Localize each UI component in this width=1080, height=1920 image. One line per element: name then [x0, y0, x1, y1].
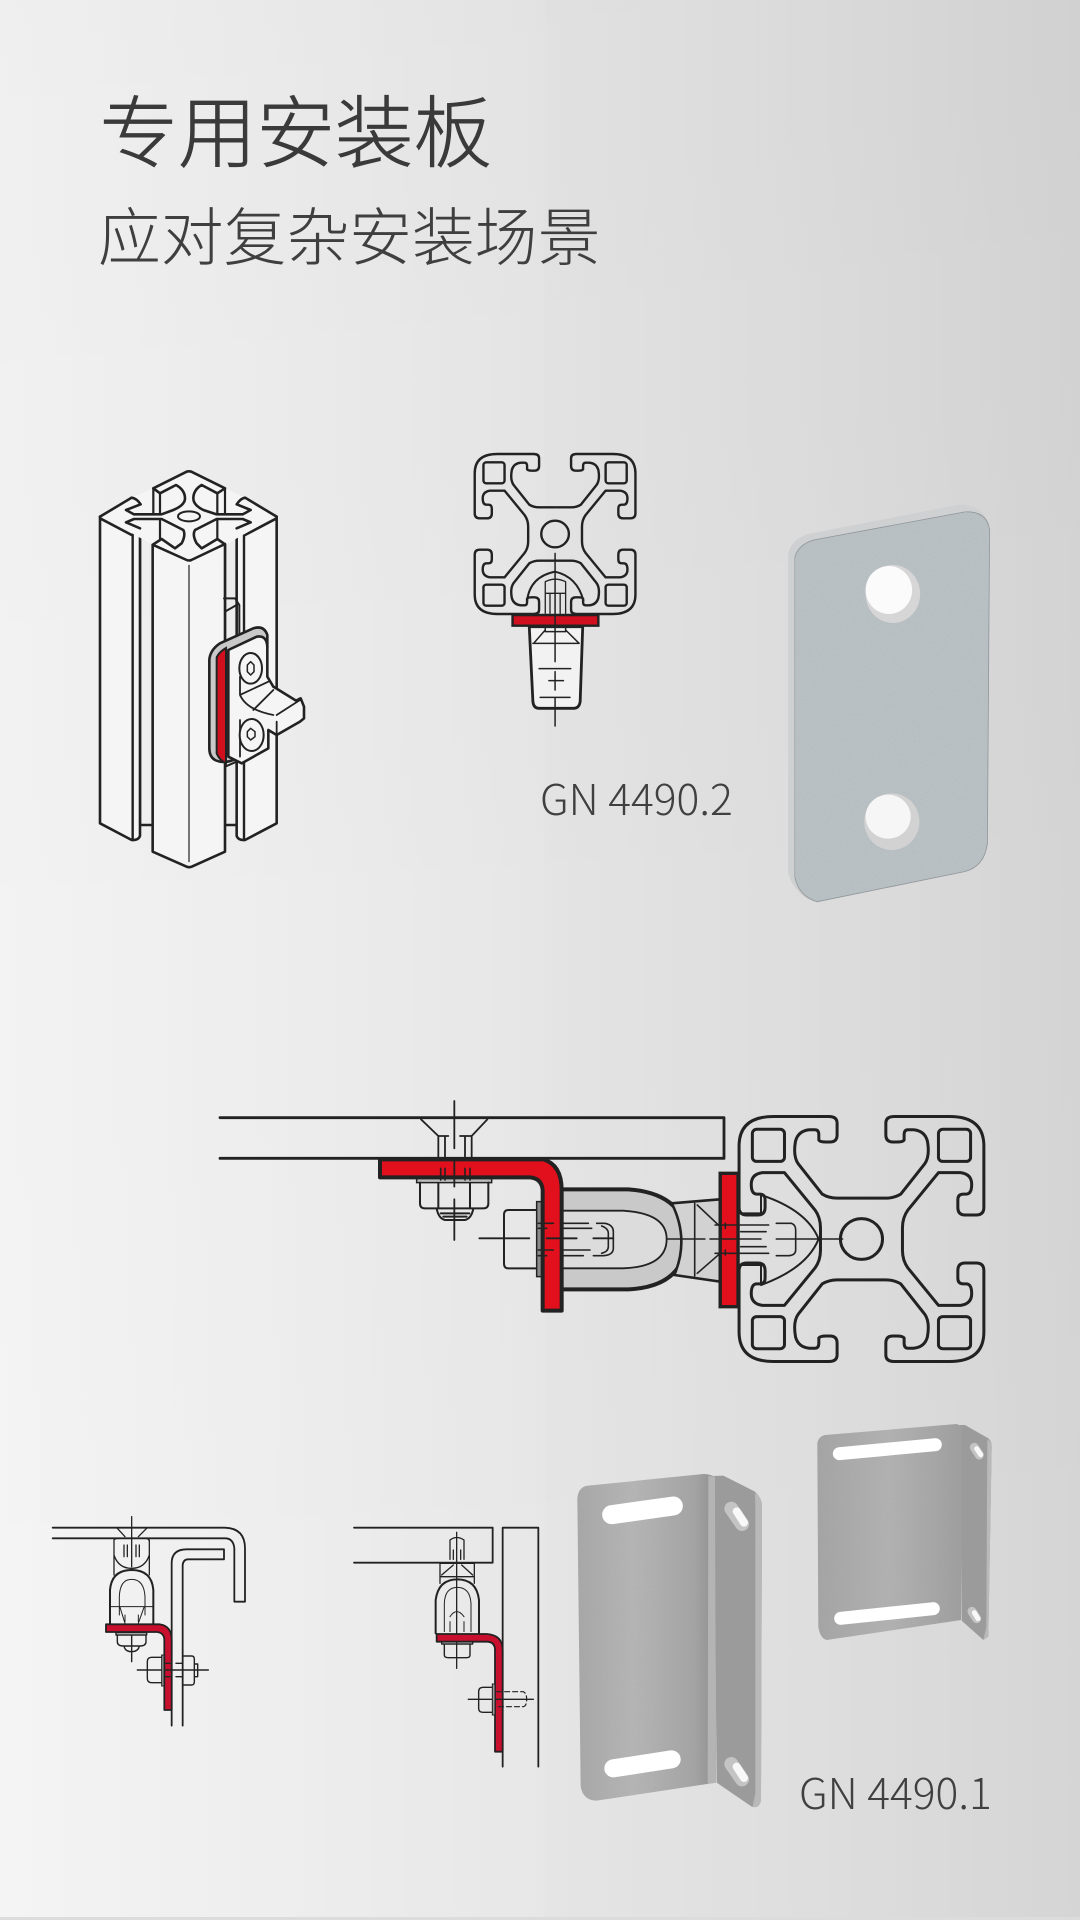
- hidden bolt lines: [441, 1168, 613, 1256]
- subtitle: 应对复杂安装场景: [98, 188, 600, 279]
- wall panel: [503, 1528, 538, 1767]
- red angle bracket: [380, 1159, 562, 1311]
- swivel foot: [529, 627, 583, 708]
- clamp body: [228, 636, 304, 763]
- countersunk screw: [421, 1119, 487, 1157]
- drawing: mounting example on wall panel: [354, 1528, 538, 1767]
- side bolt: [137, 1656, 208, 1685]
- plate face: [795, 512, 990, 902]
- drawing: profile cross-section with plate and swivel: [475, 454, 635, 726]
- slots: [839, 1445, 935, 1454]
- swivel body: [557, 1189, 687, 1289]
- T-nut arch: [527, 572, 583, 601]
- red plate: [720, 1173, 738, 1307]
- label: GN 4490.2: GN 4490.2: [540, 767, 733, 828]
- upper hole: [866, 565, 920, 623]
- flange: [960, 1425, 992, 1640]
- red bracket: [106, 1624, 172, 1710]
- plate outer edge: [209, 627, 267, 762]
- board: [354, 1528, 493, 1563]
- right wing: [237, 517, 277, 840]
- drawing: mounting example on hooked panel: [53, 1517, 245, 1726]
- T-nut: [741, 1195, 819, 1285]
- screws: [239, 653, 262, 684]
- red bracket: [437, 1634, 503, 1752]
- profile: [739, 1117, 984, 1361]
- flange holes: [731, 1509, 742, 1524]
- bend highlight: [708, 1476, 716, 1784]
- profile: [475, 454, 635, 614]
- hex nut: [420, 1183, 488, 1220]
- red plate: [217, 648, 226, 763]
- centre lines: [454, 1101, 613, 1240]
- screw and block: [114, 1517, 149, 1575]
- slot nut behind: [224, 598, 239, 767]
- second panel: [172, 1549, 224, 1726]
- board, bracket and nut: [220, 1101, 724, 1311]
- front pillar: [153, 544, 225, 867]
- slots: [612, 1506, 673, 1515]
- profile end face: [100, 471, 277, 562]
- plate edge: [788, 505, 989, 903]
- centre lines: [539, 553, 571, 726]
- board: [220, 1118, 724, 1158]
- flange holes: [974, 1447, 979, 1455]
- title: 专用安装板: [100, 70, 492, 184]
- swivel: [436, 1579, 479, 1633]
- swivel: [110, 1570, 153, 1624]
- hidden bolt lines at profile: [667, 1223, 843, 1256]
- cone: [672, 1199, 720, 1282]
- back strips: [140, 515, 237, 825]
- lower hole: [864, 793, 919, 850]
- left wing: [100, 517, 140, 840]
- drawing: board, angle bracket, swivel and profile: [220, 1101, 984, 1361]
- drawing: isometric aluminium profile with mounting plate: [100, 471, 304, 867]
- block and hidden screw: [440, 1532, 474, 1668]
- product photo: small angle bracket GN 4490.1: [817, 1424, 992, 1640]
- clamp details: [240, 677, 300, 757]
- product photo: flat plate GN 4490.2: [788, 505, 990, 903]
- bolt inside: [539, 579, 571, 613]
- nut: [442, 1642, 473, 1658]
- washer under nut: [417, 1178, 492, 1183]
- main face: [817, 1424, 962, 1640]
- swivel, cone and profile: [557, 1117, 984, 1361]
- side bolt: [468, 1687, 533, 1712]
- nut: [116, 1633, 147, 1662]
- label: GN 4490.1: GN 4490.1: [799, 1761, 992, 1822]
- hooked board: [53, 1528, 245, 1602]
- flange: [714, 1476, 762, 1807]
- centre hole: [178, 511, 200, 521]
- red plate: [513, 615, 598, 626]
- bolt head: [504, 1210, 537, 1268]
- product photo: large angle bracket GN 4490.1: [577, 1474, 762, 1807]
- main face: [577, 1474, 716, 1801]
